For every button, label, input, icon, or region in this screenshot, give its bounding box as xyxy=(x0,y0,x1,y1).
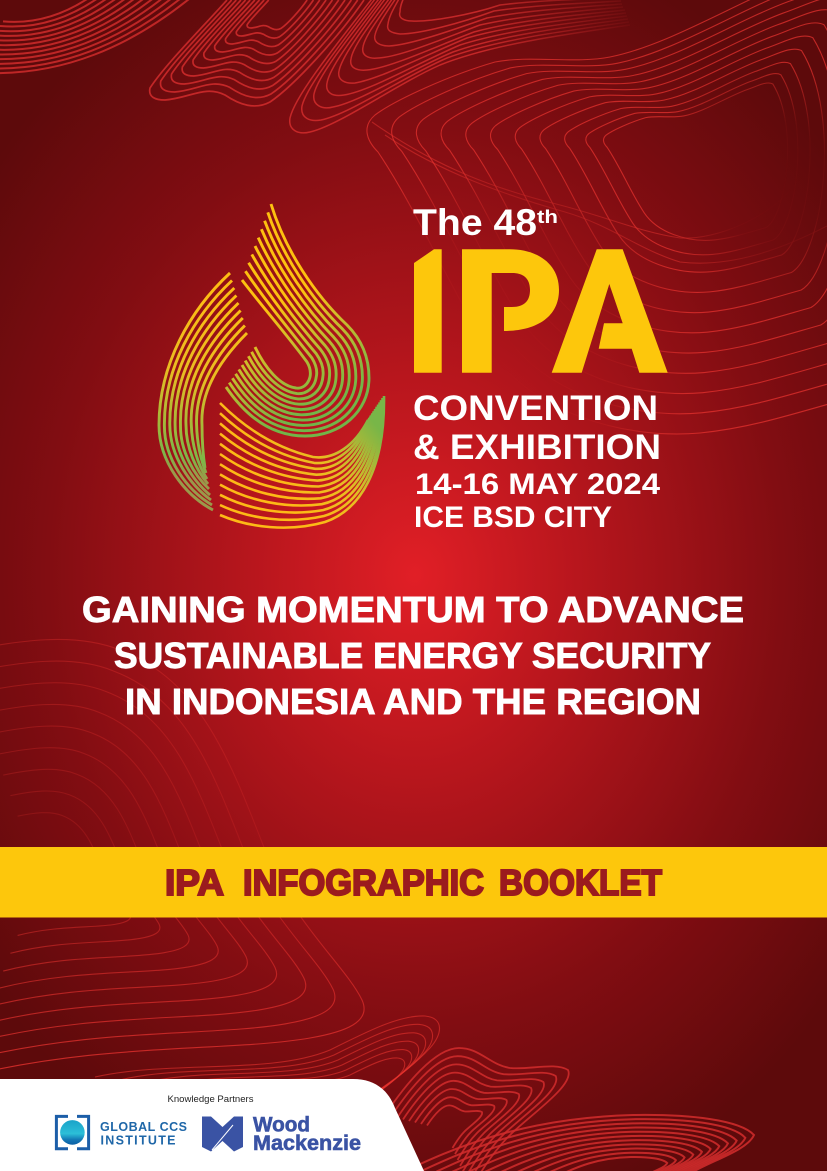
banner: IPA infographic booklet xyxy=(0,847,827,918)
text: The 48th: th xyxy=(537,207,558,227)
headline: GAINING MOMENTUM TO ADVANCE xyxy=(82,589,744,630)
logo: Global CCS Institute xyxy=(56,1116,187,1149)
text: convention and exhibition xyxy=(413,389,661,467)
text: The 48th: The 48 xyxy=(413,202,537,243)
headline xyxy=(82,589,744,722)
icon: IPA oil-drop logo xyxy=(159,204,384,528)
logo: Global CCS Institute: GLOBAL CCS xyxy=(100,1120,187,1134)
text: knowledge partners label: Knowledge Partners xyxy=(168,1094,254,1105)
headline: SUSTAINABLE ENERGY SECURITY xyxy=(114,635,711,676)
event title block xyxy=(413,202,668,534)
logo: bottom crescent band xyxy=(220,396,384,528)
logo: Global CCS Institute: INSTITUTE xyxy=(100,1134,176,1148)
text: convention and exhibition: & EXHIBITION xyxy=(413,428,661,467)
text: convention and exhibition: CONVENTION xyxy=(413,389,658,428)
text: date and venue: ICE BSD CITY xyxy=(414,501,612,534)
wordmark: IPA xyxy=(414,249,668,373)
logo: left strand band xyxy=(159,273,247,510)
logo: Wood Mackenzie: Mackenzie xyxy=(253,1132,361,1155)
text: date and venue xyxy=(414,468,661,534)
banner: IPA infographic booklet: INFOGRAPHIC xyxy=(243,862,484,903)
banner: IPA infographic booklet: IPA xyxy=(165,862,224,903)
text: date and venue: 14-16 MAY 2024 xyxy=(415,468,661,501)
logo: Wood Mackenzie xyxy=(202,1114,361,1155)
logo: Wood Mackenzie: Wood xyxy=(253,1114,310,1136)
headline: IN INDONESIA AND THE REGION xyxy=(125,681,701,722)
panel: knowledge partners xyxy=(0,1079,424,1171)
banner: IPA infographic booklet: BOOKLET xyxy=(499,862,662,903)
logo: hook strand band xyxy=(226,204,369,436)
